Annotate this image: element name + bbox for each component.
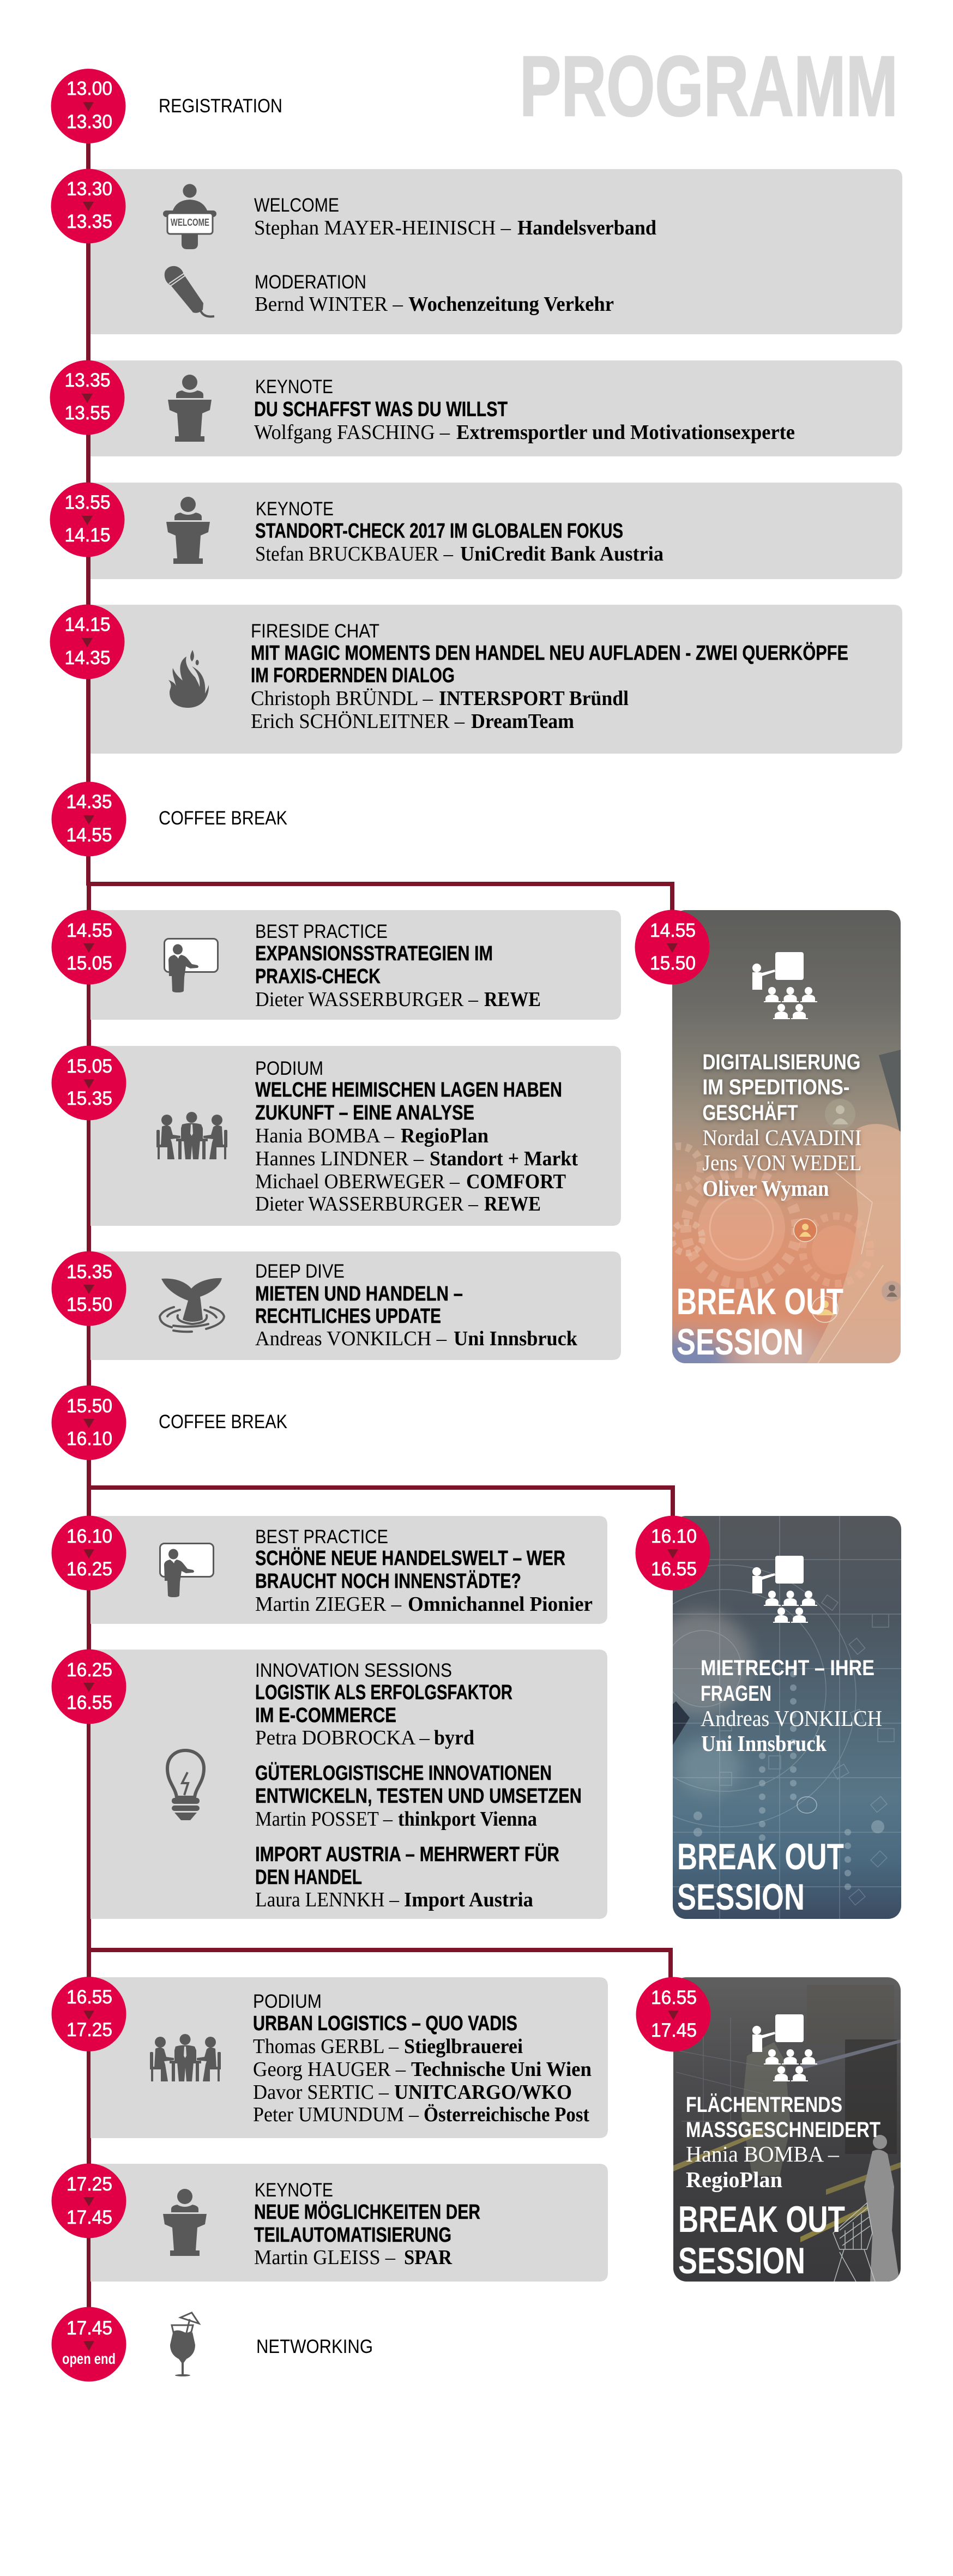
time badge 13.30-13.35: 13.35: [67, 211, 112, 232]
text: best practice: BRAUCHT NOCH INNENSTÄDTE?: [255, 1569, 521, 1593]
time badge 17.45-open end: [51, 2307, 126, 2382]
time badge 14.35-14.55: [51, 782, 126, 856]
text: best practice: [255, 1526, 593, 1616]
text: session info: [702, 1050, 861, 1201]
panel: welcome and moderation: [91, 169, 902, 334]
panel: deep dive: [91, 1251, 621, 1360]
text: session info: [701, 1656, 882, 1756]
text: session info: GESCHÄFT: [702, 1101, 798, 1125]
text: podium: Standort + Markt: [430, 1147, 578, 1170]
time badge 14.55-15.05: [51, 910, 126, 985]
timeline spine: [86, 106, 91, 2309]
time badge 13.30-13.35: 13.30: [67, 178, 112, 200]
text: keynote Gleiss: SPAR: [404, 2246, 452, 2269]
text: keynote Fasching: [254, 376, 795, 444]
text: keynote Fasching: Wolfgang FASCHING –: [254, 421, 450, 444]
icon: meeting table: [156, 1112, 227, 1159]
text: fireside chat: Erich SCHÖNLEITNER –: [251, 710, 465, 733]
text: podium: ZUKUNFT – EINE ANALYSE: [255, 1102, 474, 1124]
text: best practice: PRAXIS-CHECK: [255, 965, 381, 988]
panel: podium heimische Lagen: [91, 1046, 621, 1226]
coffee break label: COFFEE BREAK: [159, 808, 287, 829]
time badge 15.50-16.10: 15.50: [67, 1395, 112, 1417]
text: fireside chat: [251, 621, 848, 733]
panel background art: [673, 1977, 901, 2282]
panel: fireside chat: [91, 605, 902, 754]
time badge 13.30-13.35: [51, 169, 125, 243]
time badge 13.55-14.15: 14.15: [64, 525, 110, 546]
time badge 14.15-14.35: 14.35: [64, 647, 110, 669]
time badge 13.55-14.15: 13.55: [64, 492, 110, 513]
text: podium: Technische Uni Wien: [411, 2058, 592, 2081]
time badge 16.10-16.25: [51, 1516, 126, 1590]
text: innovation sessions: [255, 1660, 582, 1911]
time badge 13.00-13.30: 13.00: [67, 78, 112, 99]
text: fireside chat: INTERSPORT Bründl: [439, 687, 629, 710]
text: best practice: Dieter WASSERBURGER –: [255, 988, 479, 1011]
text: session info: Oliver Wyman: [702, 1176, 829, 1201]
time badge 17.25-17.45: 17.25: [67, 2174, 112, 2195]
text: podium: PODIUM: [255, 1058, 323, 1079]
text: innovation sessions: IMPORT AUSTRIA – MEHRWERT FÜR: [255, 1843, 559, 1866]
text: innovation sessions: ENTWICKELN, TESTEN UND UMSETZEN: [255, 1785, 582, 1808]
time badge 13.35-13.55: [50, 360, 124, 435]
time badge 17.25-17.45: 17.45: [67, 2207, 112, 2228]
text: keynote Gleiss: NEUE MÖGLICHKEITEN DER: [254, 2200, 480, 2224]
time badge 16.55-17.45 break out: [636, 1977, 711, 2051]
text: best practice: BEST PRACTICE: [255, 1526, 388, 1548]
time badge 13.35-13.55: 13.55: [64, 402, 110, 424]
text: session info: MIETRECHT – IHRE: [701, 1656, 874, 1680]
text: keynote Bruckbauer: UniCredit Bank Austria: [460, 543, 664, 565]
text: session info: FLÄCHENTRENDS: [686, 2093, 842, 2117]
time badge 15.35-15.50: 15.35: [67, 1261, 112, 1283]
icon: welcome sign person: [163, 184, 216, 249]
time badge 16.55-17.25: 17.25: [67, 2019, 112, 2041]
time badge 14.55-15.50 break out: 15.50: [650, 953, 696, 974]
time badge 15.35-15.50: [51, 1251, 126, 1326]
time badge 17.25-17.45: [51, 2164, 126, 2238]
text: welcome: Handelsverband: [517, 216, 656, 239]
time badge 14.55-15.50 break out: [635, 910, 710, 985]
text: session info: FRAGEN: [701, 1682, 771, 1706]
text: podium: COMFORT: [466, 1170, 566, 1193]
panel: break out session Digitalisierung: [672, 910, 901, 1363]
time badge 15.05-15.35: [51, 1046, 126, 1120]
text: podium: [253, 1991, 592, 2126]
text: break out session: [677, 1281, 843, 1363]
text: best practice: BEST PRACTICE: [255, 921, 388, 942]
time badge 14.15-14.35: [50, 604, 124, 679]
text: break out session: BREAK OUT: [677, 1281, 843, 1322]
networking label: NETWORKING: [256, 2336, 373, 2357]
text: moderation: Wochenzeitung Verkehr: [408, 293, 614, 316]
text: break out session: [677, 1836, 844, 1918]
icon: cocktail: [170, 2313, 199, 2376]
text: podium: UNITCARGO/WKO: [394, 2081, 572, 2104]
time badge 16.55-17.45 break out: 17.45: [651, 2020, 697, 2041]
text: podium: PODIUM: [253, 1991, 322, 2012]
text: innovation sessions: INNOVATION SESSIONS: [255, 1660, 452, 1681]
text: innovation sessions: Import Austria: [404, 1888, 533, 1911]
time badge 16.10-16.55 break out: [636, 1516, 710, 1590]
panel: keynote Gleiss: [91, 2164, 608, 2282]
text: deep dive: Andreas VONKILCH –: [255, 1327, 447, 1350]
text: session info: Jens VON WEDEL: [702, 1150, 861, 1175]
text: podium: RegioPlan: [401, 1124, 488, 1147]
text: keynote Fasching: Extremsportler und Motivationsexperte: [456, 421, 795, 444]
time badge 15.05-15.35: 15.35: [67, 1088, 112, 1109]
panel background art: [673, 1516, 901, 1919]
time badge 17.45-open end: open end: [62, 2350, 116, 2367]
coffee break label: COFFEE BREAK: [159, 1411, 287, 1433]
time badge 14.35-14.55: 14.35: [67, 791, 112, 812]
text: break out session: SESSION: [677, 1321, 804, 1363]
text: deep dive: MIETEN UND HANDELN –: [255, 1283, 463, 1305]
text: moderation: [255, 272, 614, 316]
text: best practice: SCHÖNE NEUE HANDELSWELT – WER: [255, 1546, 565, 1570]
icon: lectern: [163, 2189, 207, 2256]
branch connector 3: [89, 1948, 673, 1979]
text: fireside chat: FIRESIDE CHAT: [251, 621, 379, 642]
text: session info: MASSGESCHNEIDERT: [686, 2118, 880, 2142]
text: keynote Gleiss: Martin GLEISS –: [254, 2246, 396, 2269]
text: innovation sessions: DEN HANDEL: [255, 1866, 362, 1889]
text: innovation sessions: LOGISTIK ALS ERFOLGSFAKTOR: [255, 1681, 512, 1704]
text: deep dive: Uni Innsbruck: [454, 1327, 578, 1350]
text: keynote Gleiss: TEILAUTOMATISIERUNG: [254, 2224, 451, 2247]
text: break out session: [678, 2199, 845, 2282]
panel: podium urban logistics: [91, 1977, 608, 2138]
text: moderation: Bernd WINTER –: [255, 293, 403, 316]
text: moderation: MODERATION: [255, 272, 366, 293]
text: session info: Hania BOMBA –: [686, 2141, 839, 2166]
time badge 13.55-14.15: [50, 482, 124, 557]
text: welcome: Stephan MAYER-HEINISCH –: [254, 216, 511, 239]
text: keynote Fasching: DU SCHAFFST WAS DU WILLST: [254, 398, 508, 421]
panel: break out session Flächentrends: [673, 1977, 901, 2282]
text: innovation sessions: Martin POSSET –: [255, 1808, 393, 1831]
text: innovation sessions: IM E-COMMERCE: [255, 1704, 396, 1727]
panel: best practice Zieger: [91, 1516, 607, 1624]
time badge 15.35-15.50: 15.50: [67, 1294, 112, 1315]
text: fireside chat: Christoph BRÜNDL –: [251, 687, 433, 710]
text: best practice: [255, 921, 541, 1011]
icon: training audience: [752, 952, 817, 1019]
text: fireside chat: DreamTeam: [471, 710, 574, 733]
text: break out session: BREAK OUT: [678, 2199, 845, 2240]
text: deep dive: DEEP DIVE: [255, 1261, 345, 1282]
text: best practice: REWE: [484, 988, 541, 1011]
text: keynote Gleiss: [254, 2180, 480, 2269]
text: session info: [686, 2093, 880, 2192]
icon: training audience: [752, 2014, 817, 2081]
icon: lectern: [166, 497, 210, 564]
text: session info: RegioPlan: [686, 2167, 782, 2192]
text: fireside chat: IM FORDERNDEN DIALOG: [251, 664, 455, 687]
text: keynote Bruckbauer: [255, 498, 664, 565]
text: welcome: WELCOME: [254, 195, 339, 216]
time badge 16.25-16.55: 16.55: [67, 1692, 112, 1713]
text: podium: Thomas GERBL –: [253, 2035, 399, 2058]
text: podium: Österreichische Post: [424, 2103, 589, 2126]
text: break out session: SESSION: [678, 2240, 805, 2282]
panel: keynote Bruckbauer: [91, 483, 902, 579]
text: keynote Bruckbauer: Stefan BRUCKBAUER –: [255, 543, 454, 565]
time badge 15.50-16.10: 16.10: [67, 1428, 112, 1449]
time badge 15.05-15.35: 15.05: [67, 1056, 112, 1077]
icon: lectern: [168, 375, 212, 442]
icon: flame: [168, 650, 209, 708]
text: podium: Georg HAUGER –: [253, 2058, 406, 2081]
branch connector 1: [89, 882, 674, 912]
text: podium: Dieter WASSERBURGER –: [255, 1193, 479, 1215]
time badge 16.55-17.25: [51, 1977, 126, 2051]
text: innovation sessions: Petra DOBROCKA –: [255, 1726, 430, 1749]
time badge 16.25-16.55: [51, 1649, 126, 1724]
time badge 14.35-14.55: 14.55: [67, 824, 112, 846]
branch connector 2: [89, 1485, 675, 1518]
time badge 16.55-17.45 break out: 16.55: [651, 1987, 697, 2008]
text: session info: Nordal CAVADINI: [702, 1125, 861, 1150]
time badge 16.25-16.55: 16.25: [67, 1659, 112, 1681]
time badge 16.55-17.25: 16.55: [67, 1987, 112, 2008]
text: session info: Andreas VONKILCH: [701, 1706, 882, 1731]
text: keynote Gleiss: KEYNOTE: [255, 2180, 333, 2201]
time badge 14.55-15.05: 15.05: [67, 953, 112, 974]
text: welcome: [254, 195, 656, 239]
registration label: REGISTRATION: [159, 95, 282, 117]
panel: innovation sessions: [91, 1650, 607, 1919]
text: podium: Peter UMUNDUM –: [253, 2103, 419, 2126]
time badge 16.10-16.25: 16.10: [67, 1526, 112, 1547]
panel background art: [672, 910, 901, 1363]
icon: microphone: [165, 266, 214, 317]
time badge 15.50-16.10: [51, 1385, 126, 1460]
icon: welcome sign person: WELCOME: [171, 217, 209, 228]
icon: meeting table: [150, 2034, 221, 2081]
time badge 16.10-16.55 break out: 16.10: [651, 1526, 697, 1547]
text: deep dive: [255, 1261, 578, 1350]
text: break out session: SESSION: [677, 1876, 805, 1918]
time badge 16.10-16.55 break out: 16.55: [651, 1558, 697, 1580]
text: best practice: Martin ZIEGER –: [255, 1593, 402, 1616]
text: session info: IM SPEDITIONS-: [702, 1075, 849, 1099]
time badge 17.45-open end: 17.45: [67, 2318, 112, 2339]
text: keynote Fasching: KEYNOTE: [255, 376, 333, 398]
text: podium: REWE: [484, 1193, 541, 1215]
time badge 13.00-13.30: [51, 69, 125, 143]
text: keynote Bruckbauer: KEYNOTE: [256, 498, 334, 520]
text: session info: DIGITALISIERUNG: [702, 1050, 860, 1074]
text: podium: Davor SERTIC –: [253, 2081, 389, 2104]
time badge 14.15-14.35: 14.15: [64, 614, 110, 635]
panel: best practice Wasserburger: [91, 910, 621, 1020]
icon: training audience: [752, 1556, 817, 1623]
text: keynote Bruckbauer: STANDORT-CHECK 2017 IM GLOBALEN FOKUS: [255, 520, 623, 543]
time badge 16.10-16.25: 16.25: [67, 1558, 112, 1580]
icon: light bulb: [167, 1750, 204, 1820]
text: deep dive: RECHTLICHES UPDATE: [255, 1305, 441, 1328]
time badge 13.35-13.55: 13.35: [64, 370, 110, 391]
time badge 14.55-15.50 break out: 14.55: [650, 920, 696, 941]
text: podium: [255, 1058, 578, 1215]
icon: whale tail: [160, 1278, 224, 1332]
text: innovation sessions: Laura LENNKH –: [255, 1888, 400, 1911]
icon: presenter at board: [160, 1543, 214, 1597]
text: innovation sessions: byrd: [434, 1726, 474, 1749]
text: podium: Hania BOMBA –: [255, 1124, 395, 1147]
icon: presenter at board: [165, 939, 218, 992]
text: podium: Stieglbrauerei: [404, 2035, 523, 2058]
panel: keynote Fasching: [91, 360, 902, 456]
time badge 13.00-13.30: 13.30: [67, 111, 112, 133]
text: podium: Michael OBERWEGER –: [255, 1170, 460, 1193]
text: podium: Hannes LINDNER –: [255, 1147, 424, 1170]
text: best practice: EXPANSIONSSTRATEGIEN IM: [255, 942, 493, 965]
text: innovation sessions: thinkport Vienna: [398, 1808, 537, 1831]
text: podium: URBAN LOGISTICS – QUO VADIS: [253, 2012, 517, 2035]
time badge 14.55-15.05: 14.55: [67, 920, 112, 941]
text: break out session: BREAK OUT: [677, 1836, 844, 1877]
panel: break out session Mietrecht: [673, 1516, 901, 1919]
text: best practice: Omnichannel Pionier: [408, 1593, 593, 1616]
text: innovation sessions: GÜTERLOGISTISCHE INNOVATIONEN: [255, 1761, 552, 1785]
text: session info: Uni Innsbruck: [701, 1731, 827, 1756]
text: podium: WELCHE HEIMISCHEN LAGEN HABEN: [255, 1079, 562, 1102]
